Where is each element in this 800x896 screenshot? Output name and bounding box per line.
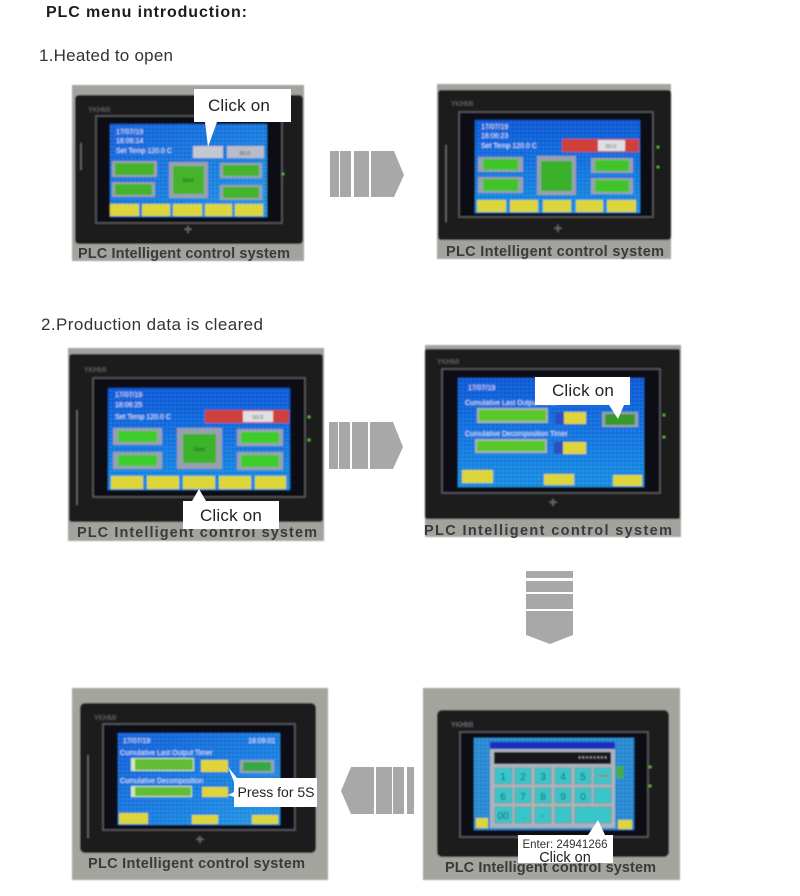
device photo: YKHMI [437, 359, 459, 366]
device photo: + [554, 220, 562, 236]
device photo: . [522, 811, 524, 822]
caption: PLC Intelligent control system [78, 246, 290, 262]
device photo: 18:06:23 [481, 133, 508, 140]
photo: main menu [68, 348, 324, 541]
device photo: 9 [560, 792, 566, 803]
callout: click on: Click on [200, 506, 262, 525]
caption: PLC Intelligent control system [446, 244, 664, 260]
device photo: 6 [500, 792, 506, 803]
device photo: ******** [578, 756, 608, 763]
device photo: 17/07/19 [468, 385, 495, 392]
device photo: + [184, 221, 192, 237]
photo: panel after heating [437, 84, 671, 260]
device photo: Start [193, 447, 205, 453]
device photo: YKHMI [84, 367, 106, 374]
device photo: 4 [560, 772, 566, 783]
device photo: 50.0 [253, 415, 263, 421]
device photo [423, 688, 680, 880]
device photo: 3 [540, 772, 546, 783]
device photo: YKHMI [451, 101, 473, 108]
device photo: 17/07/19 [123, 738, 150, 745]
arrow: down [526, 571, 573, 644]
device photo: 17/07/19 [115, 392, 142, 399]
callout: click on [535, 377, 630, 419]
device photo: Set Temp 120.0 C [116, 148, 172, 155]
device photo: 50.0 [606, 144, 616, 150]
callout: enter code: Enter: 24941266 [522, 839, 608, 851]
photo: keypad screen [423, 688, 680, 880]
photo: reset screen [72, 688, 328, 880]
arrow: left [341, 767, 414, 814]
device photo [425, 345, 681, 537]
callout: press for 5S [228, 767, 317, 807]
device photo: 00 [497, 811, 509, 822]
callout: enter code [518, 820, 613, 866]
title: PLC menu introduction: [46, 4, 247, 21]
device photo: 1 [500, 772, 506, 783]
device photo: 17/07/19 [116, 129, 143, 136]
device photo: 18:06:25 [115, 402, 142, 409]
callout: click on [194, 89, 291, 147]
arrow: right 2 [329, 422, 403, 469]
device photo [437, 84, 671, 259]
device photo: 18:06:14 [116, 138, 143, 145]
device photo: 8 [540, 792, 546, 803]
arrow: right 1 [330, 151, 404, 197]
device photo: Set Temp 120.0 C [115, 414, 171, 421]
photo: clear data screen [424, 345, 681, 539]
device photo [68, 348, 324, 541]
heading: step 1: 1.Heated to open [39, 46, 173, 65]
device photo: YKHMI [94, 715, 116, 722]
callout: click on [183, 489, 279, 529]
caption: PLC Intelligent control system [445, 860, 656, 876]
heading: step 2: 2.Production data is cleared [41, 315, 263, 334]
callout: click on: Click on [208, 96, 270, 115]
device photo: + [196, 831, 204, 847]
caption: PLC Intelligent control system [77, 525, 317, 541]
device photo: 0 [580, 792, 586, 803]
caption: PLC Intelligent control system [424, 523, 672, 539]
callout: enter code: Click on [539, 850, 591, 866]
device photo: 17/07/19 [481, 124, 508, 131]
device photo: Cumulative Decomposition Timer [465, 431, 568, 438]
device photo [72, 688, 328, 880]
device photo: Cumulative Last Output Timer [465, 400, 558, 407]
device photo: YKHMI [88, 107, 110, 114]
device photo: 2 [520, 772, 526, 783]
device photo: Set Temp 120.0 C [481, 143, 537, 150]
callout: click on: Click on [552, 381, 614, 400]
device photo: YKHMI [451, 722, 473, 729]
callout: press for 5S: Press for 5S [237, 784, 315, 800]
device photo: 7 [520, 792, 526, 803]
device photo: Cumulative Last Output Timer [120, 750, 213, 757]
device photo: + [549, 494, 557, 510]
photo: panel before heating [72, 85, 304, 262]
device photo: 18:09:01 [248, 738, 275, 745]
device photo [72, 85, 304, 261]
device photo: 5 [580, 772, 586, 783]
caption: PLC Intelligent control system [88, 856, 305, 872]
device photo: Start [182, 178, 194, 184]
device photo: Cumulative Decomposition [120, 778, 203, 785]
device photo: 50.0 [240, 151, 250, 157]
device photo: - [541, 811, 545, 822]
